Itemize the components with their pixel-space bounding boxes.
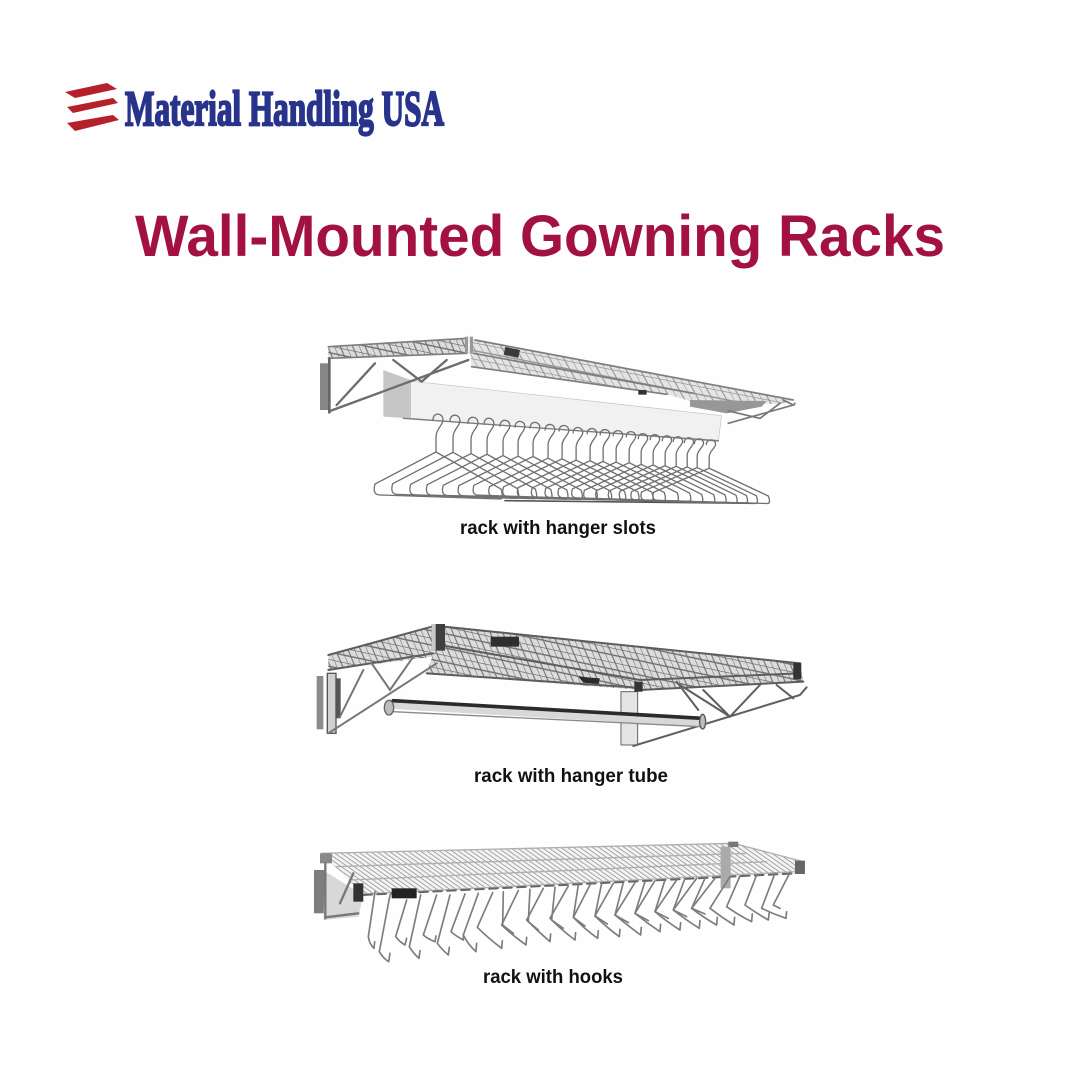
logo wordmark: Material Handling USA	[125, 80, 444, 136]
title: Wall-Mounted Gowning Racks	[135, 204, 945, 269]
hanger tube	[384, 700, 706, 729]
hooks	[368, 873, 790, 962]
logo: Material Handling USA	[65, 80, 444, 136]
caption: rack with hanger tube: rack with hanger tube	[474, 766, 668, 787]
caption: rack with hanger slots: rack with hanger slots	[460, 518, 656, 539]
caption: rack with hooks: rack with hooks	[483, 967, 623, 988]
icon: red stacked shelves	[65, 83, 119, 131]
image: rack with hanger slots	[320, 337, 795, 504]
image: rack with hanger tube	[317, 624, 807, 746]
image: rack with hooks	[314, 842, 805, 962]
